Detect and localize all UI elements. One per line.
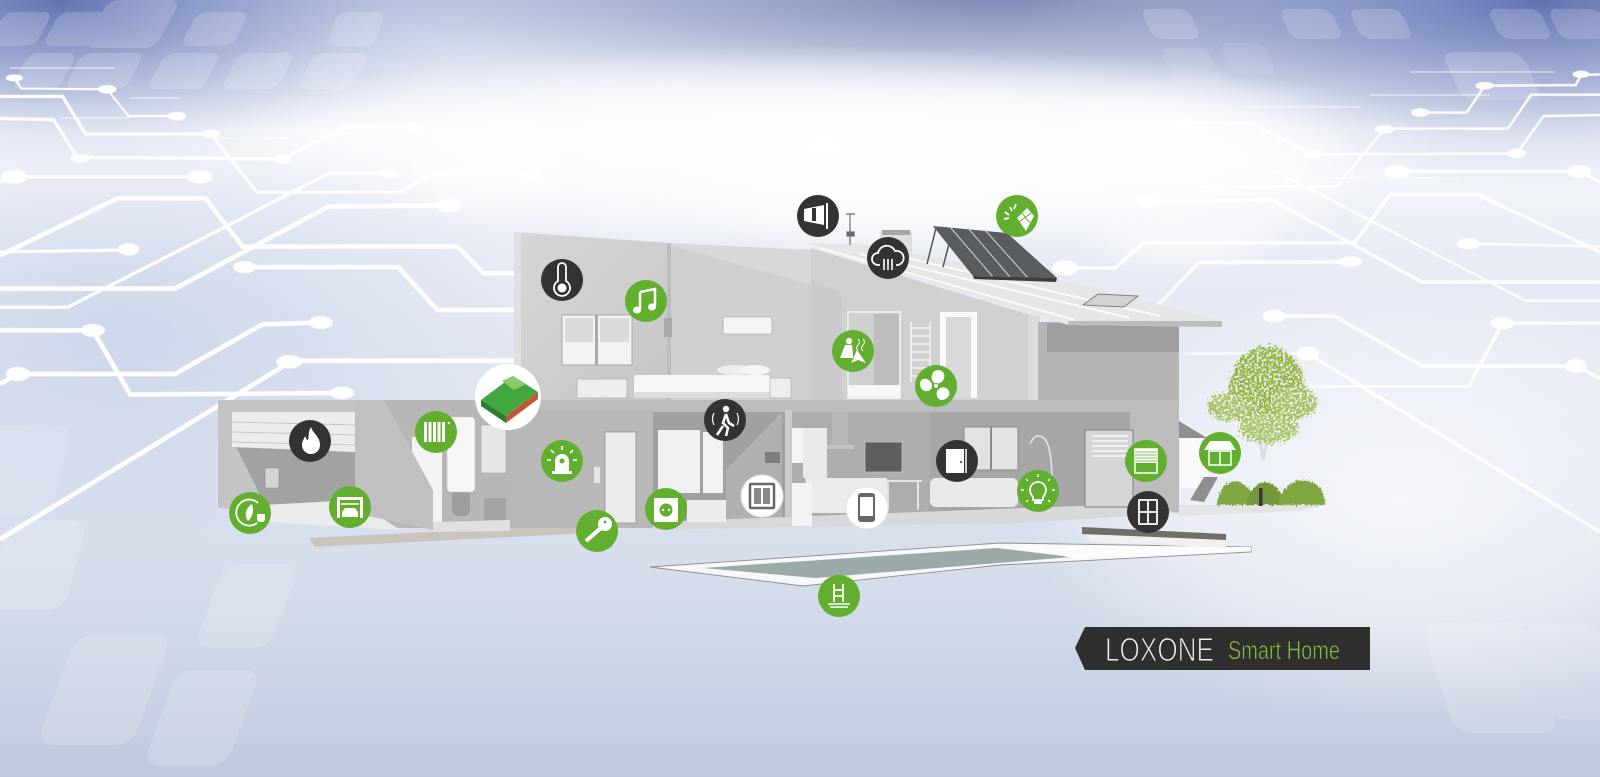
icon: outdoor thermometer	[541, 259, 583, 301]
roof	[807, 243, 1222, 327]
tree	[1208, 346, 1318, 460]
logo badge	[1075, 627, 1370, 670]
floor slab	[512, 400, 1168, 412]
garage	[218, 400, 433, 530]
upper bedroom wall	[667, 243, 842, 400]
house cutaway	[218, 214, 1325, 586]
television	[865, 442, 902, 472]
icon: music	[625, 280, 667, 322]
solar panel	[927, 226, 1057, 282]
icon: rain cloud	[867, 237, 909, 279]
sofa	[930, 478, 1018, 507]
icon: solar sun	[996, 195, 1038, 237]
patio door	[1085, 430, 1133, 507]
icon: pool ladder	[818, 575, 860, 617]
window upper	[562, 315, 632, 365]
icon: light bulb	[1017, 470, 1059, 512]
icon: alarm siren	[541, 440, 583, 482]
icon: window blind	[1125, 440, 1167, 482]
weather station	[846, 214, 855, 245]
patio shelter	[1179, 421, 1208, 488]
bedroom furniture	[577, 365, 791, 398]
garden light	[1259, 488, 1262, 506]
icon: sauna presence	[832, 330, 874, 372]
icon: key	[576, 510, 618, 552]
icon: window contact	[1127, 491, 1169, 533]
logo badge: LOXONE	[1105, 631, 1214, 668]
icon: electric car charging	[229, 492, 271, 534]
front door	[594, 432, 636, 523]
lower floor	[510, 400, 1179, 530]
floor lamp	[1030, 436, 1052, 485]
circuit board lines, right	[1052, 71, 1600, 532]
bushes	[1217, 480, 1325, 505]
icon: light switch	[741, 475, 783, 517]
wardrobes	[658, 430, 780, 522]
icon: wall socket	[645, 488, 687, 530]
circuit board lines, left	[0, 74, 542, 539]
roof vent	[880, 230, 912, 256]
living room window	[964, 427, 1018, 470]
upper right wall and bathroom	[811, 248, 1179, 400]
icon: garage door	[329, 486, 371, 528]
icon: fire	[289, 420, 331, 462]
icon: ventilation fan	[915, 365, 957, 407]
icon: awning	[1199, 432, 1241, 474]
logo badge: Smart Home	[1228, 635, 1340, 665]
ground path	[309, 524, 590, 547]
icon: door	[936, 440, 978, 482]
icon: smartphone	[846, 487, 888, 529]
pool	[650, 527, 1251, 586]
icon: wind sensor	[797, 195, 839, 237]
icon: radiator	[415, 411, 457, 453]
air conditioner	[723, 317, 772, 334]
patio lounger	[1190, 477, 1218, 502]
upper tall wall	[514, 232, 669, 400]
faint ghost circuit lines	[10, 68, 1555, 178]
utility room	[384, 400, 512, 532]
icon: miniserver controller	[475, 364, 541, 430]
white veil over lines near house	[390, 70, 1370, 280]
kitchen	[792, 412, 922, 526]
icon: motion sensor	[704, 399, 746, 441]
patio ground	[1179, 505, 1325, 516]
